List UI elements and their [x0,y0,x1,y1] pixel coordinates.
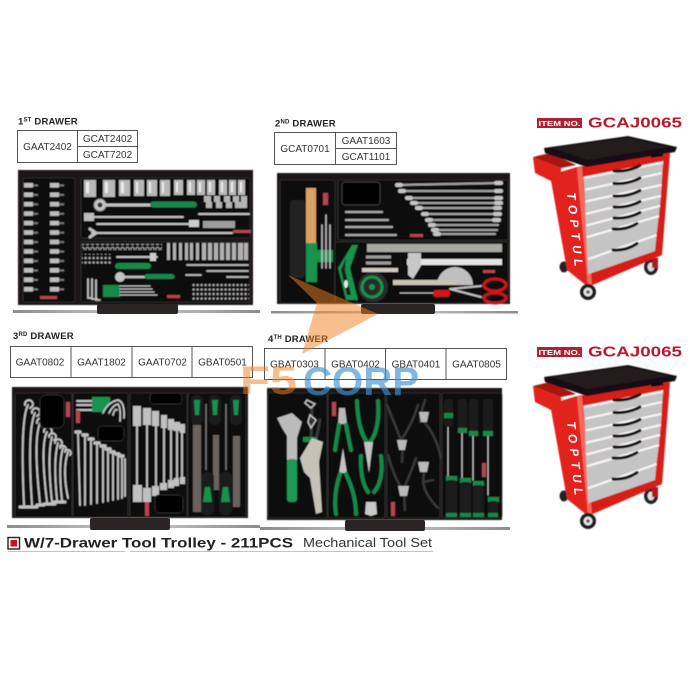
part number table: third drawer: GBAT0501 [198,358,247,368]
part number table: second drawer: GAAT1603 [342,136,391,147]
watermark arrow [288,275,378,354]
hex key set [77,397,124,421]
heading: 1st drawer: 1 [18,116,23,128]
icon: red square bullet [8,538,20,549]
part number table: fourth drawer: GAAT0805 [452,360,501,370]
footer caption [8,534,433,552]
tool trolley illustration [533,365,677,529]
product title: W/7-Drawer Tool Trolley - 211PCS [24,534,293,550]
top row sockets [84,180,245,197]
heading: 3rd drawer: 3 [13,331,18,342]
panel: trolley top [533,114,682,300]
item number badge [537,118,582,128]
side brand text: TOPTUL [564,192,586,267]
part number table: third drawer [10,346,252,378]
steel ruler [367,244,502,252]
heading: 2nd drawer: 2 [275,118,280,130]
item number badge [537,347,582,357]
heading: 2nd drawer: ND [280,120,290,126]
watermark orange letters: F5 [240,359,297,403]
part number table: second drawer: GCAT0701 [280,144,330,155]
panel: fourth drawer [260,334,510,531]
long nose plier [357,401,378,473]
needle nose plier [335,448,356,514]
drawer pull [97,304,178,314]
part number table: fourth drawer: GBAT0401 [392,360,441,370]
shelf [7,525,260,528]
panel: second drawer [271,118,518,314]
part number table: first drawer: GCAT7202 [83,150,133,161]
water pump pliers [303,400,320,442]
drawer pull [361,304,435,314]
diagonal cutter [361,456,382,516]
screwdrivers [444,399,499,517]
empty tray recess [342,182,380,205]
drawer tray with tools [18,170,253,305]
green ratchet [115,266,172,282]
punches [322,215,330,268]
extension bars [84,213,251,237]
tape measure [358,272,388,302]
heading: 1st drawer: DRAWER [32,116,78,128]
drawer tray with tools [267,388,502,520]
small sockets [204,196,247,208]
hammer [290,188,333,282]
part number table: fourth drawer: GBAT0303 [270,360,319,370]
deep sockets [167,243,248,260]
item number: GCAJ0065 [588,114,682,132]
shelf [271,311,518,314]
part number table: third drawer: GAAT1802 [77,358,126,368]
watermark blue letters: CORP [303,360,419,404]
small sockets row [82,244,162,250]
panel: third drawer [7,331,260,530]
drawer tray with tools [277,173,510,304]
bit sockets [24,183,65,293]
scissors [450,279,506,303]
item number badge: ITEM NO. [538,348,580,357]
combination plier [335,408,351,450]
protractor [393,267,473,285]
right bars [186,265,248,277]
bit cluster [192,283,249,301]
circlip pliers [387,400,441,510]
shelf [260,527,510,530]
hex keys [88,279,157,300]
item number badge: ITEM NO. [538,119,580,128]
part number table: first drawer: GCAT2402 [83,134,133,145]
panel: first drawer [13,116,260,314]
small spanners [346,212,396,235]
file set [191,395,242,515]
drawer pull [90,518,170,530]
heading: 4th drawer: DRAWER [282,334,328,345]
drawer tray with tools [12,387,248,518]
part number table: second drawer: GCAT1101 [342,152,391,163]
part number table: first drawer: GAAT2402 [23,142,72,153]
heading: 3rd drawer: DRAWER [28,331,74,342]
item number: GCAJ0065 [588,344,682,360]
labels [40,296,57,299]
part number table: first drawer [18,130,138,162]
watermark: F5 CORP logo [240,275,419,404]
drawer pull [345,520,425,531]
part number table: fourth drawer: GBAT0402 [331,360,380,370]
tool trolley illustration [533,136,677,300]
locking pliers [300,438,323,514]
heading: 4th drawer: TH [273,335,282,341]
caliper [407,253,502,279]
flex socket spanners [133,406,185,502]
adjustable wrench [277,413,302,502]
T handle [117,256,157,258]
heading: 2nd drawer: DRAWER [290,118,336,130]
part number table: fourth drawer [264,348,506,380]
combination spanners [78,433,125,505]
big spanners [397,183,501,234]
part number table: third drawer: GAAT0702 [138,358,187,368]
product subtitle: Mechanical Tool Set [303,536,433,550]
part number table: third drawer: GAAT0802 [16,358,65,368]
part number table: second drawer [274,132,396,164]
offset ring spanners [20,400,71,507]
side brand text: TOPTUL [564,421,586,496]
heading: 4th drawer: 4 [268,334,273,345]
heading: 3rd drawer: RD [18,332,28,338]
cutter knife [338,245,358,300]
heading: 1st drawer: ST [23,118,32,124]
shelf [13,310,260,313]
ratchet wrench [94,199,194,211]
panel: trolley bottom [533,344,682,529]
small tools [366,257,391,263]
screwdriver [400,292,434,294]
